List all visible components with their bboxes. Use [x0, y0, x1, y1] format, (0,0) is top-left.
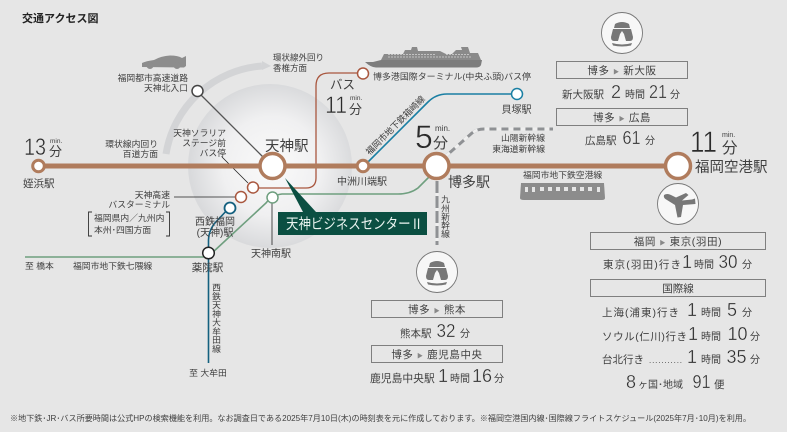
- panel: flights: 分: [742, 307, 752, 319]
- time: Meinohama 13 min: 分: [49, 144, 62, 159]
- time: bus 11 min: min.: [350, 95, 362, 102]
- labels: stations: (天神)駅: [197, 226, 233, 239]
- panel: Shin-Osaka and Hiroshima: 時間: [625, 89, 645, 101]
- icon: shinkansen top: [602, 12, 642, 54]
- labels: stations: 博多駅: [448, 174, 490, 190]
- time: Hakata 5 min: min.: [435, 124, 450, 133]
- panel: flights: [590, 232, 766, 392]
- labels: rail lines: 九州新幹線: [440, 195, 450, 239]
- Tenjin area circle: [188, 84, 352, 248]
- panel: Shin-Osaka and Hiroshima: 分: [670, 89, 680, 101]
- panel: flights: 台北行き: [602, 353, 644, 366]
- time: Meinohama 13 min: [24, 134, 62, 161]
- title: 交通アクセス図: [22, 11, 98, 25]
- station markers: [33, 68, 690, 259]
- panel: flights: 福岡 ▶ 東京(羽田): [634, 235, 722, 248]
- bus route line: [253, 73, 360, 188]
- callout: Tenjin Business Center II: 天神ビジネスセンターⅡ: [286, 216, 423, 233]
- panel: flights: 10: [728, 324, 748, 344]
- time: bus 11 min: 分: [349, 102, 362, 117]
- expressway line: [197, 91, 263, 157]
- panel: flights: 分: [750, 331, 760, 343]
- labels: rail lines: 博多港国際ターミナル(中央ふ頭)バス停: [373, 72, 532, 82]
- panel: flights: 1: [687, 347, 697, 367]
- panel: Kumamoto and Kagoshima: 時間: [450, 373, 470, 385]
- labels: northwest: [105, 72, 226, 210]
- labels: northwest: バス停: [200, 147, 226, 158]
- panel: Shin-Osaka and Hiroshima: 分: [645, 135, 655, 147]
- labels: northwest: 天神高速: [135, 189, 170, 200]
- time: bus 11 min: 11: [325, 92, 347, 119]
- panel: flights: 時間: [694, 259, 714, 271]
- labels: northwest: 天神ソラリア: [173, 127, 226, 138]
- icon: airplane: [658, 184, 698, 224]
- callout: Tenjin Business Center II: [278, 178, 427, 235]
- panel: Shin-Osaka and Hiroshima: 2: [611, 82, 621, 102]
- labels: northwest: 天神北入口: [144, 82, 188, 93]
- icon: airport train: [520, 183, 605, 200]
- panel: Shin-Osaka and Hiroshima: 広島駅: [585, 134, 617, 147]
- labels: stations: 天神駅: [265, 138, 309, 155]
- bracket note: 本州･四国方面: [94, 224, 151, 235]
- panel: flights: ソウル(仁川)行き: [602, 330, 687, 343]
- labels: rail lines: 福岡市地下鉄空港線: [523, 169, 602, 180]
- panel: Shin-Osaka and Hiroshima: 21: [649, 82, 667, 102]
- time: bus 11 min: [325, 78, 362, 119]
- panel: Kumamoto and Kagoshima: 博多 ▶ 鹿児島中央: [391, 348, 483, 361]
- footnote: ※地下鉄･JR･バス所要時間は公式HPの検索機能を利用。なお調査日である2025年7月10日(木)の時刻表を元に作成しております。※福岡空港国内線･国際線フライトスケジュール(2025年7月･10月)を利用。: [10, 413, 751, 423]
- panel: flights: 国際線: [662, 282, 694, 295]
- Nanakuma subway line: [25, 174, 432, 257]
- panel: flights: 1: [687, 300, 697, 320]
- panel: flights: 分: [750, 354, 760, 366]
- labels: rail lines: 西鉄天神大牟田線: [211, 283, 221, 354]
- panel: Kumamoto and Kagoshima: 分: [494, 373, 504, 385]
- main rail line: [38, 164, 678, 168]
- panel: flights: ヶ国･地域: [638, 378, 683, 391]
- labels: rail lines: 福岡市地下鉄七隈線: [73, 260, 152, 271]
- icon: ship: [365, 47, 482, 68]
- panel: flights: 時間: [701, 354, 721, 366]
- Nishitetsu line: [208, 208, 229, 363]
- icon: car: [142, 56, 186, 69]
- labels: stations: 薬院駅: [192, 262, 224, 274]
- panel: Kumamoto and Kagoshima: 分: [460, 328, 470, 340]
- labels: rail lines: [25, 72, 602, 378]
- time: airport 11 min: min.: [722, 132, 735, 139]
- panel: Shin-Osaka and Hiroshima: 新大阪駅: [562, 88, 604, 101]
- leader lines: [174, 157, 272, 245]
- panel: flights: 1: [682, 252, 692, 272]
- labels: rail lines: 東海道新幹線: [492, 143, 545, 154]
- panel: flights: 35: [726, 347, 746, 367]
- panel: flights: 東京(羽田)行き: [603, 258, 681, 271]
- icon: shinkansen bottom: [416, 252, 458, 292]
- bracket note: 福岡県内／九州内: [94, 212, 164, 223]
- panel: flights: 時間: [701, 307, 721, 319]
- panel: flights: ...........: [649, 356, 682, 365]
- time: Meinohama 13 min: 13: [24, 134, 46, 161]
- labels: northwest: バスターミナル: [108, 200, 170, 210]
- time: Hakata 5 min: 5: [415, 119, 433, 155]
- panel: Kumamoto and Kagoshima: 熊本駅: [400, 327, 432, 340]
- panel: Kumamoto and Kagoshima: 博多 ▶ 熊本: [408, 303, 466, 316]
- time: Hakata 5 min: [415, 119, 450, 155]
- labels: rail lines: 福岡市地下鉄箱崎線: [363, 93, 427, 157]
- labels: stations: 天神南駅: [251, 247, 291, 260]
- labels: stations: 福岡空港駅: [695, 159, 768, 176]
- labels: northwest: 百道方面: [123, 148, 158, 159]
- labels: stations: 貝塚駅: [502, 104, 532, 116]
- labels: stations: [23, 104, 768, 274]
- panel: flights: 30: [718, 252, 738, 272]
- bracket note: [88, 212, 170, 236]
- panel: Shin-Osaka and Hiroshima: 61: [622, 128, 640, 148]
- Sanyo Shinkansen line: [446, 129, 553, 156]
- time: Meinohama 13 min: min.: [50, 138, 62, 145]
- panel: Shin-Osaka and Hiroshima: 博多 ▶ 広島: [593, 111, 651, 124]
- labels: rail lines: 山陽新幹線: [501, 132, 545, 143]
- panel: flights: 分: [742, 259, 752, 271]
- labels: stations: 西鉄福岡: [195, 215, 235, 228]
- panel: Shin-Osaka and Hiroshima: [556, 62, 688, 148]
- panel: Kumamoto and Kagoshima: 1: [438, 366, 448, 386]
- panel: flights: 上海(浦東)行き: [602, 306, 679, 319]
- panel: Kumamoto and Kagoshima: [370, 300, 504, 386]
- Hakozaki subway line: [366, 94, 514, 164]
- panel: flights: 91: [692, 372, 710, 392]
- labels: stations: 姪浜駅: [23, 177, 55, 190]
- Kyushu Shinkansen line: [436, 178, 438, 245]
- labels: stations: 中洲川端駅: [337, 175, 387, 188]
- panel: flights: 8: [626, 372, 636, 392]
- time: airport 11 min: 分: [722, 139, 738, 157]
- labels: northwest: ステージ前: [182, 137, 226, 148]
- label: outer loop: 香椎方面: [273, 63, 308, 73]
- labels: rail lines: 至 橋本: [25, 260, 54, 271]
- panel: flights: 1: [688, 324, 698, 344]
- time: airport 11 min: 11: [690, 126, 717, 159]
- panel: Kumamoto and Kagoshima: 32: [436, 321, 456, 341]
- label: outer loop: [273, 52, 324, 73]
- time: airport 11 min: [690, 126, 738, 159]
- panel: Kumamoto and Kagoshima: 16: [472, 366, 492, 386]
- loop line arc: [166, 61, 271, 154]
- labels: northwest: 環状線内回り: [105, 138, 158, 149]
- panel: Kumamoto and Kagoshima: 鹿児島中央駅: [370, 371, 435, 385]
- panel: Shin-Osaka and Hiroshima: 博多 ▶ 新大阪: [587, 64, 657, 77]
- panel: flights: 時間: [701, 331, 721, 343]
- panel: flights: 5: [727, 300, 737, 320]
- panel: flights: 便: [714, 378, 725, 391]
- time: Hakata 5 min: 分: [433, 135, 448, 152]
- label: outer loop: 環状線外回り: [273, 52, 324, 62]
- labels: rail lines: 至 大牟田: [189, 367, 227, 378]
- time: bus 11 min: バス: [330, 78, 355, 92]
- labels: northwest: 福岡都市高速道路: [118, 72, 188, 83]
